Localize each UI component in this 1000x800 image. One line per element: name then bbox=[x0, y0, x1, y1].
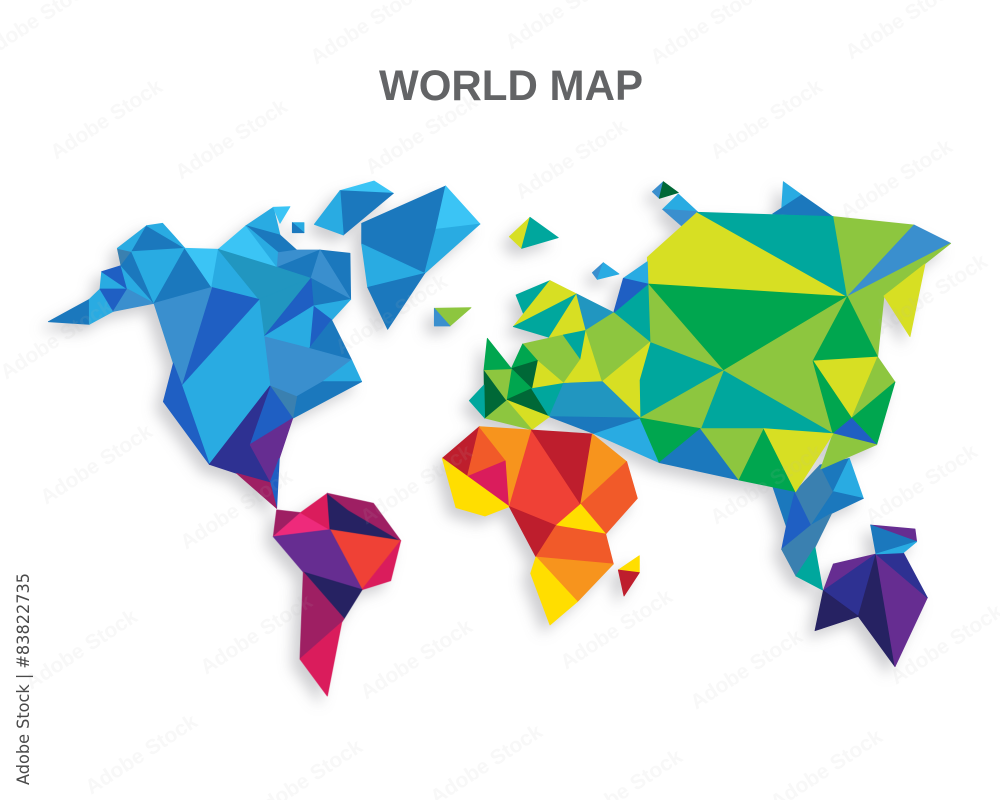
South America bbox=[273, 493, 401, 696]
watermark pattern: Adobe Stock bbox=[686, 625, 807, 714]
Africa bbox=[442, 427, 639, 625]
title: WORLD MAP bbox=[379, 62, 643, 110]
stock ID side label: Adobe Stock | #83822735 bbox=[14, 573, 34, 785]
watermark pattern: Adobe Stock bbox=[171, 95, 292, 184]
watermark pattern: Adobe Stock bbox=[46, 75, 167, 164]
watermark pattern: Adobe Stock bbox=[356, 440, 477, 529]
watermark pattern: Adobe Stock bbox=[556, 585, 677, 674]
watermark pattern: Adobe Stock bbox=[706, 440, 827, 529]
Europe and Middle East bbox=[469, 281, 650, 433]
watermark pattern: Adobe Stock bbox=[196, 590, 317, 679]
watermark pattern: Adobe Stock bbox=[706, 75, 827, 164]
watermark pattern: Adobe Stock bbox=[331, 270, 452, 359]
world map bbox=[48, 181, 951, 696]
watermark pattern: Adobe Stock bbox=[511, 115, 632, 204]
Baffin island and Greenland bbox=[314, 181, 480, 329]
watermark pattern: Adobe Stock bbox=[861, 440, 982, 529]
watermark pattern: Adobe Stock bbox=[21, 605, 142, 694]
watermark pattern: Adobe Stock bbox=[176, 465, 297, 554]
Asia bbox=[509, 182, 951, 492]
Southeast Asia bbox=[772, 458, 863, 590]
watermark pattern: Adobe Stock bbox=[36, 420, 157, 509]
watermark pattern: Adobe Stock bbox=[871, 250, 992, 339]
North America bbox=[48, 207, 362, 508]
Australia and New Guinea bbox=[815, 525, 927, 667]
watermark pattern: Adobe Stock bbox=[836, 135, 957, 224]
watermark pattern: Adobe Stock bbox=[81, 710, 202, 799]
watermark pattern: Adobe Stock bbox=[361, 90, 482, 179]
watermark pattern: Adobe Stock bbox=[356, 615, 477, 704]
